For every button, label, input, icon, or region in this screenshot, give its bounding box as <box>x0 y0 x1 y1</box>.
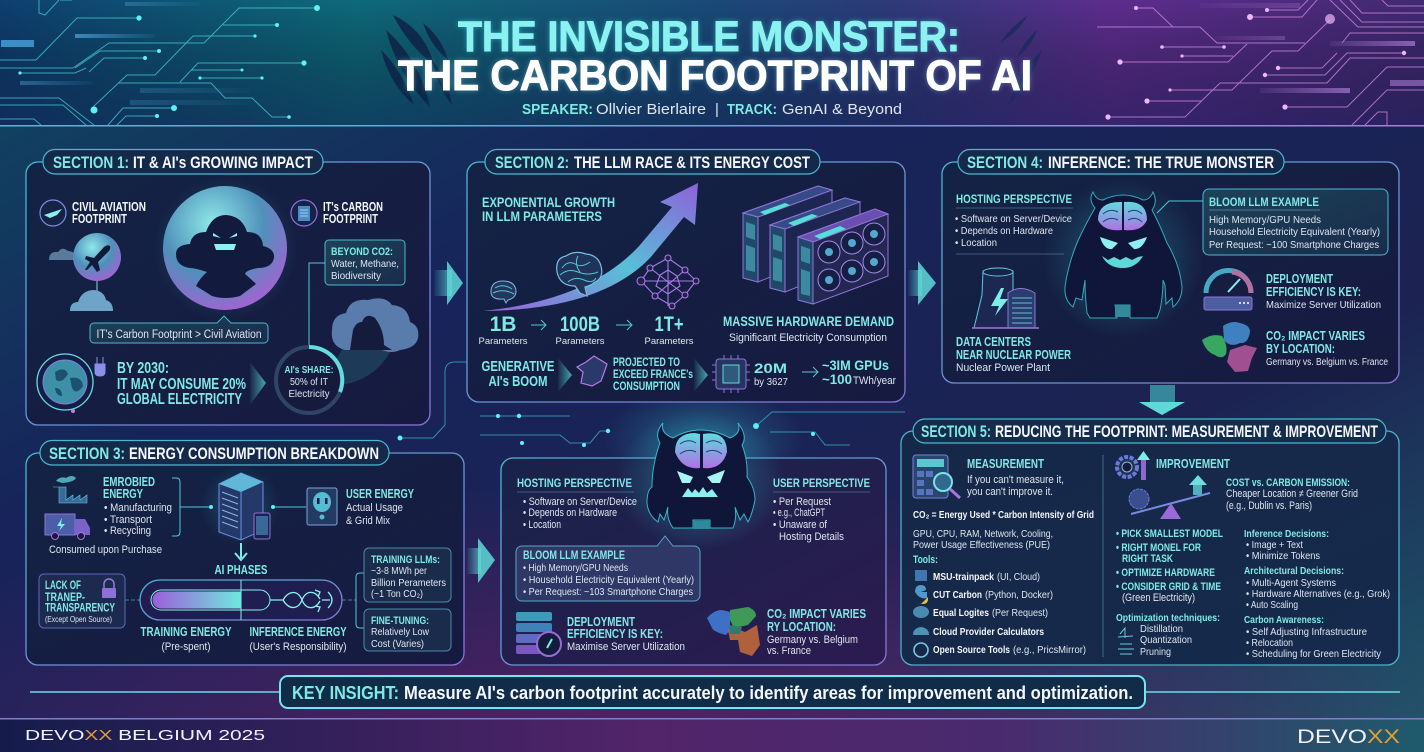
text: embodied energy: ENERGY <box>103 487 143 501</box>
list: improvement actions: (Green Electricity) <box>1122 592 1195 604</box>
list: decisions: • Minimize Tokens <box>1246 550 1320 562</box>
list: optimization techniques <box>1116 612 1220 658</box>
callout: training LLMs: TRAINING LLMs: <box>371 554 440 566</box>
text: data centers <box>956 335 1071 374</box>
list: decisions: • Auto Scaling <box>1246 599 1298 611</box>
text: deployment efficiency <box>1266 272 1381 311</box>
chevron <box>694 358 708 392</box>
label: inference energy: INFERENCE ENERGY <box>250 625 347 639</box>
arrow: section 3 to monster <box>467 538 495 583</box>
icon: France map <box>577 356 607 386</box>
icon: factory and truck <box>45 476 90 540</box>
heading: section 5: SECTION 5: <box>921 422 991 441</box>
stat: by 2030: BY 2030: <box>117 360 169 377</box>
icon: chip <box>712 355 750 393</box>
text: embodied energy: • Manufacturing <box>104 502 172 514</box>
list: optimization techniques: Optimization techniques: <box>1116 612 1220 624</box>
text: components: Power Usage Effectiveness (PUE) <box>913 539 1050 551</box>
callout: lack of transparency: LACK OF <box>45 580 81 592</box>
heading: section 1: SECTION 1: <box>53 153 129 172</box>
text: hosting perspective: HOSTING PERSPECTIVE <box>517 476 632 490</box>
list: decisions: • Relocation <box>1246 637 1293 649</box>
list: decisions: • Scheduling for Green Electricity <box>1246 648 1382 660</box>
callout: carbon footprint comparison: IT's Carbon Footprint > Civil Aviation <box>96 329 262 341</box>
label: inference energy <box>250 625 347 653</box>
panel: section 2 <box>467 150 905 402</box>
label: exponential growth <box>482 195 615 224</box>
callout: lack of transparency: (Except Open Source) <box>45 614 112 624</box>
text: data centers: DATA CENTERS <box>956 335 1031 349</box>
list: tools: (e.g., PricsMirror) <box>1013 644 1086 656</box>
arrow: section 4 to 5 <box>1139 385 1185 415</box>
text: deployment efficiency <box>567 615 685 653</box>
list: improvement actions: RIGHT TASK <box>1122 553 1173 565</box>
text: deployment efficiency: Maximize Server Utilization <box>1266 299 1381 311</box>
heading: section 1: IT & AI's GROWING IMPACT <box>133 153 313 172</box>
callout: beyond CO2: BEYOND CO2: <box>331 246 393 258</box>
label: generative AI boom: AI's BOOM <box>488 374 548 390</box>
speaker and track: TRACK: <box>727 101 777 118</box>
list: tools <box>913 570 1086 657</box>
label: training energy: (Pre-spent) <box>162 641 210 653</box>
icon: plane badge <box>40 200 66 226</box>
speaker and track: Ollvier Bierlaire <box>596 101 706 118</box>
label: improvement: IMPROVEMENT <box>1156 457 1230 471</box>
callout: fine-tuning <box>364 609 451 651</box>
callout: beyond CO2: Water, Methane, <box>331 258 399 270</box>
text: hosting perspective: • Software on Server/Device <box>523 496 637 508</box>
title: THE INVISIBLE MONSTER: <box>458 13 960 61</box>
stat: parameter counts: Parameters <box>556 336 605 347</box>
callout: fine-tuning: FINE-TUNING: <box>371 615 429 627</box>
label: IT's carbon footprint <box>323 200 383 226</box>
text: projected to exceed France: CONSUMPTION <box>613 381 680 393</box>
text: hosting perspective: • Depends on Hardware <box>523 507 617 519</box>
text: CO2 varies: vs. France <box>767 645 811 657</box>
stat: parameter counts: 1B <box>490 313 516 336</box>
text: deployment efficiency: DEPLOYMENT <box>567 615 635 629</box>
icon: claw scratches <box>381 15 1042 107</box>
footer: right logo: DEVO XX <box>1297 727 1400 748</box>
text: embodied energy: EMROBIED <box>103 475 155 489</box>
heading: section 1 <box>43 150 323 174</box>
label: massive hardware demand <box>723 314 894 344</box>
text: cost vs carbon: (e.g., Dublin vs. Paris) <box>1226 500 1312 512</box>
chart: training and inference pipeline <box>125 580 356 620</box>
speaker and track: GenAI & Beyond <box>782 101 902 118</box>
text: user perspective: USER PERSPECTIVE <box>773 476 870 490</box>
chevron <box>558 358 572 392</box>
text: embodied energy: • Recycling <box>104 525 151 537</box>
list: decisions: Architectural Decisions: <box>1244 565 1344 577</box>
text: CO2 varies: RY LOCATION: <box>767 620 836 634</box>
text: hosting perspective <box>517 476 637 531</box>
list: decisions: • Multi-Agent Systems <box>1246 577 1336 589</box>
list: improvement actions: • OPTIMIZE HARDWARE <box>1116 567 1215 579</box>
callout: bloom LLM example <box>1157 189 1388 255</box>
callout: lack of transparency <box>39 574 125 628</box>
callout: fine-tuning: Relatively Low <box>371 626 429 638</box>
text: deployment efficiency: DEPLOYMENT <box>1266 272 1333 286</box>
title <box>398 13 1032 100</box>
text: CO2 varies <box>1266 329 1388 368</box>
list: tools: Open Source Tools <box>933 644 1010 656</box>
text: cost vs carbon: Cheaper Location ≠ Greener Grid <box>1226 488 1358 500</box>
text: CO2 varies: CO₂ IMPACT VARIES <box>767 607 866 621</box>
text: projected to exceed France <box>613 357 693 393</box>
label: generative AI boom <box>482 359 555 390</box>
list: decisions <box>1244 528 1390 660</box>
callout: training LLMs: Billion Perameters <box>371 577 446 589</box>
icon: gear with arrow <box>1117 451 1150 480</box>
list: decisions: Inference Decisions: <box>1244 528 1329 540</box>
heading: section 4 <box>958 150 1284 174</box>
icon: server and phone <box>200 465 280 545</box>
icon: smoke cloud <box>320 298 418 385</box>
list: tools: (UI, Cloud) <box>997 571 1040 583</box>
heading: section 3: ENERGY CONSUMPTION BREAKDOWN <box>129 444 379 463</box>
list: improvement actions <box>1116 528 1223 604</box>
callout: carbon footprint comparison <box>90 316 268 343</box>
text: user energy <box>346 487 414 527</box>
text: measurement <box>967 457 1064 498</box>
callout: lack of transparency: TRANSPARENCY <box>45 602 115 614</box>
callout: training LLMs: (~1 Ton CO₂) <box>371 588 423 600</box>
stat: by 2030: IT MAY CONSUME 20% <box>117 376 246 393</box>
text: CO2 varies: Germany vs. Belgium <box>767 634 858 646</box>
stat: GPUs by 2027: ~100 <box>822 371 852 387</box>
heading: section 3: SECTION 3: <box>49 444 125 463</box>
callout: bloom LLM example: BLOOM LLM EXAMPLE <box>1209 195 1319 209</box>
chart: growth arrow <box>483 183 698 311</box>
stat: parameter counts: 1T+ <box>654 313 684 336</box>
icon: document badge <box>291 200 317 226</box>
label: civil aviation footprint: CIVIL AVIATION <box>72 200 146 214</box>
label: AI phases: AI PHASES <box>214 563 268 577</box>
heading: section 2: THE LLM RACE & ITS ENERGY COST <box>574 153 810 172</box>
text: CO2 varies: CO₂ IMPACT VARIES <box>1266 329 1365 343</box>
callout: bloom LLM example: High Memory/GPU Needs <box>1209 214 1321 226</box>
text: cost vs carbon: COST vs. CARBON EMISSION: <box>1226 477 1350 489</box>
list: improvement actions: • CONSIDER GRID & TIME <box>1116 581 1221 593</box>
text: user perspective: • Unaware of <box>773 519 828 531</box>
text: components: GPU, CPU, RAM, Network, Cooling, <box>913 528 1053 540</box>
text: hosting perspective: • Location <box>523 519 561 531</box>
list: tools: MSU-trainpack <box>933 571 994 583</box>
label: civil aviation footprint: FOOTPRINT <box>72 212 127 226</box>
icon: outlet <box>307 488 337 525</box>
text: deployment efficiency: EFFICIENCY IS KEY: <box>1266 285 1361 299</box>
label: inference energy: (User's Responsibility) <box>250 641 346 653</box>
text: embodied energy: • Transport <box>104 514 152 526</box>
title: THE CARBON FOOTPRINT OF AI <box>398 52 1032 100</box>
callout: beyond CO2 <box>309 240 405 346</box>
list: decisions: • Self Adjusting Infrastructure <box>1246 626 1367 638</box>
panel: section 1 <box>26 150 430 425</box>
arrow: section 2 to 4 <box>908 261 936 305</box>
text: deployment efficiency: Maximise Server Utilization <box>567 641 685 653</box>
stat: by 2030 <box>117 360 246 408</box>
icon: map <box>707 607 760 656</box>
panel: section 4 <box>942 150 1399 383</box>
title: THE INVISIBLE MONSTER: <box>458 13 960 61</box>
callout: beyond CO2: Biodiversity <box>331 270 382 282</box>
footer: left logo: DEVO XX BELGIUM 2025 <box>25 728 265 744</box>
icon: small brain <box>491 281 516 303</box>
callout: bloom LLM example: BLOOM LLM EXAMPLE <box>523 550 625 562</box>
list: decisions: • Hardware Alternatives (e.g., Grok) <box>1246 588 1390 600</box>
text: components <box>913 528 1053 551</box>
list: tools: CUT Carbon <box>933 589 982 601</box>
connector: embodied to server <box>172 478 213 536</box>
speaker and track <box>522 101 902 118</box>
heading: section 4: INFERENCE: THE TRUE MONSTER <box>1048 153 1274 172</box>
text: hosting perspective <box>955 192 1073 254</box>
text: CO2 varies <box>767 607 866 657</box>
list: decisions: • Image + Text <box>1246 539 1303 551</box>
list: optimization techniques: Pruning <box>1140 646 1171 658</box>
callout: bloom LLM example <box>516 536 700 601</box>
callout: fine-tuning: Cost (Varies) <box>371 638 424 650</box>
ring: AI's share: 50% of IT <box>290 377 328 388</box>
text: embodied energy: Consumed upon Purchase <box>49 544 162 556</box>
icon: airplane globe and clouds <box>49 233 121 311</box>
text: user perspective: • e.g., ChatGPT <box>773 507 825 519</box>
stat: by 2030: GLOBAL ELECTRICITY <box>117 391 242 408</box>
text: user energy: Actual Usage <box>346 502 403 514</box>
icon: monster <box>1043 178 1203 338</box>
panel: inference detail <box>501 410 886 665</box>
text: projected to exceed France: PROJECTED TO <box>613 357 680 369</box>
list: tools: Equal Logites <box>933 607 989 619</box>
icon: earth with plug <box>37 354 105 413</box>
icon: central monster <box>615 410 785 550</box>
text: user energy: & Grid Mix <box>346 515 390 527</box>
heading: section 2 <box>485 150 820 174</box>
text: embodied energy <box>49 475 172 556</box>
callout: bloom LLM example: Per Request: ~100 Smartphone Charges <box>1209 239 1379 251</box>
list: optimization techniques: Quantization <box>1140 634 1192 646</box>
callout: bloom LLM example: • Household Electricity Equivalent (Yearly) <box>523 574 694 586</box>
icon: large globe with dark cloud monster <box>153 176 297 320</box>
label: massive hardware demand: MASSIVE HARDWARE DEMAND <box>723 314 894 329</box>
text: user perspective: • Per Request <box>773 496 831 508</box>
title: THE CARBON FOOTPRINT OF AI <box>398 52 1032 100</box>
callout: training LLMs: ~3-8 MWh per <box>371 565 427 577</box>
list: tools: (Python, Docker) <box>985 589 1053 601</box>
panel: section 3 <box>26 440 464 665</box>
callout: bloom LLM example: • High Memory/GPU Needs <box>523 562 628 574</box>
stat: GPUs by 2027: by 3627 <box>754 376 788 388</box>
stat: parameter counts: Parameters <box>478 336 528 347</box>
stat: GPUs by 2027: TWh/year <box>853 375 896 387</box>
panel: section 5 <box>901 419 1399 665</box>
list: tools: (Per Request) <box>992 607 1048 619</box>
stat: GPUs by 2027: ~3IM GPUs <box>822 357 889 373</box>
label: massive hardware demand: Significant Electricity Consumption <box>729 332 887 344</box>
list: improvement actions: • PICK SMALLEST MODEL <box>1116 528 1223 540</box>
text: user perspective: Hosting Details <box>779 531 844 543</box>
list: decisions: Carbon Awareness: <box>1244 614 1324 626</box>
text: hosting perspective: • Software on Server/Device <box>955 213 1072 225</box>
stat: parameter counts <box>478 313 694 347</box>
label: exponential growth: IN LLM PARAMETERS <box>482 209 602 224</box>
speaker and track: SPEAKER: <box>522 101 593 118</box>
icon: map <box>1202 322 1257 372</box>
callout: training LLMs <box>364 548 451 602</box>
label: IT's carbon footprint: FOOTPRINT <box>323 212 378 226</box>
heading: section 2: SECTION 2: <box>495 153 569 172</box>
label: tools: Tools: <box>913 554 938 566</box>
list: optimization techniques: Distillation <box>1140 623 1183 635</box>
icon: server stack with gauge <box>516 612 561 656</box>
header <box>381 13 1042 118</box>
text: data centers: NEAR NUCLEAR POWER <box>956 348 1071 362</box>
heading: section 3 <box>40 440 389 465</box>
text: hosting perspective: HOSTING PERSPECTIVE <box>956 192 1072 206</box>
callout: lack of transparency: TRANEP- <box>45 592 85 604</box>
list: improvement actions: • RIGHT MONEL FOR <box>1116 542 1201 554</box>
label: training energy <box>140 625 232 653</box>
text: projected to exceed France: EXCEED FRANCE's <box>613 369 693 381</box>
list: tools: Cloud Provider Calculators <box>933 626 1044 638</box>
icon: large brain <box>557 252 602 296</box>
stat: parameter counts: Parameters <box>644 336 694 347</box>
connector: pipeline to notes <box>356 573 364 628</box>
stat: GPUs by 2027 <box>754 357 896 388</box>
text: data centers: Nuclear Power Plant <box>956 362 1050 374</box>
text: hosting perspective: • Location <box>955 237 997 249</box>
text: user energy: USER ENERGY <box>346 487 414 501</box>
ring: AI's share <box>276 347 342 413</box>
text: measurement: you can't improve it. <box>967 486 1053 498</box>
callout: bloom LLM example: • Per Request: ~103 Smartphone Charges <box>523 586 693 598</box>
label: training energy: TRAINING ENERGY <box>140 625 232 639</box>
icon: nuclear data center <box>972 268 1039 328</box>
label: IT's carbon footprint: IT's CARBON <box>323 200 383 214</box>
icon: neural network <box>637 255 699 309</box>
ring: AI's share: Electricity <box>288 389 330 400</box>
text: CO2 varies: BY LOCATION: <box>1266 342 1335 356</box>
stat: parameter counts: 100B <box>560 313 600 336</box>
label: exponential growth: EXPONENTIAL GROWTH <box>482 195 615 210</box>
callout: key insight <box>30 676 1400 708</box>
callout: key insight: Measure AI's carbon footprint accurately to identify areas for improvement and optimization. <box>404 683 1133 703</box>
heading: section 4: SECTION 4: <box>967 153 1043 172</box>
callout: bloom LLM example: Household Electricity Equivalent (Yearly) <box>1209 226 1380 238</box>
text: CO2 varies: Germany vs. Belgium vs. France <box>1266 357 1388 368</box>
text: user perspective <box>773 476 870 543</box>
icon: calculator with magnifier <box>913 455 960 498</box>
connector: server to outlet <box>271 505 306 509</box>
ring: AI's share: AI's SHARE: <box>284 364 334 376</box>
text: cost vs carbon <box>1226 477 1358 512</box>
text: hosting perspective: • Depends on Hardware <box>955 225 1053 237</box>
arrow: down to AI phases <box>235 543 247 560</box>
text: deployment efficiency: EFFICIENCY IS KEY: <box>567 627 663 641</box>
formula: CO2: CO₂ = Energy Used * Carbon Intensity of Grid <box>913 509 1094 521</box>
heading: section 5 <box>913 419 1386 443</box>
callout: key insight: KEY INSIGHT: <box>292 683 399 703</box>
icon: GPU stack <box>743 186 888 304</box>
arrow: section 1 to 2 <box>434 261 463 305</box>
icon: seesaw <box>1129 475 1210 519</box>
icon: gauge <box>1204 270 1252 310</box>
label: civil aviation footprint <box>72 200 146 226</box>
speaker and track: | <box>715 101 719 118</box>
text: measurement: MEASUREMENT <box>967 457 1044 471</box>
stat: GPUs by 2027: 20M <box>754 360 787 376</box>
chevron <box>250 362 266 405</box>
text: measurement: If you can't measure it, <box>967 474 1064 486</box>
label: generative AI boom: GENERATIVE <box>482 359 555 375</box>
